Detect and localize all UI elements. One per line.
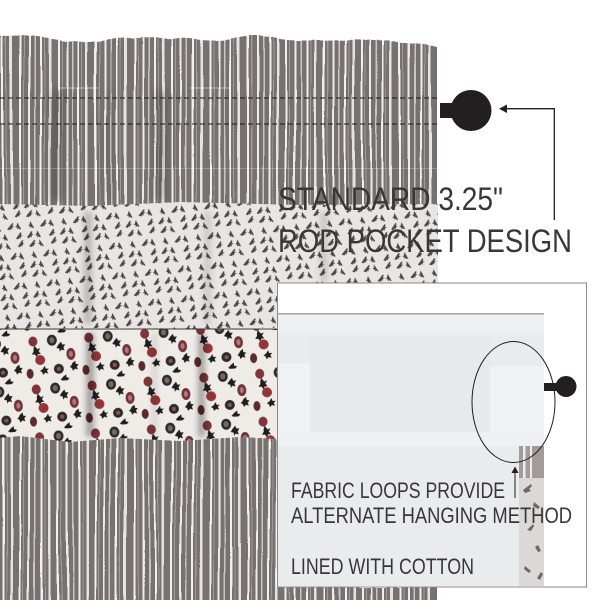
icon: curtain rod finial (440, 90, 492, 131)
arrow: fabric loop callout (512, 466, 518, 498)
icon: small rod finial (544, 376, 576, 397)
heading: rod pocket design (278, 181, 572, 259)
rod pocket stitching lines (0, 98, 438, 124)
heading: rod pocket design: STANDARD 3.25" (278, 181, 503, 217)
inset caption: FABRIC LOOPS PROVIDE (291, 478, 505, 503)
lining fabric (278, 313, 544, 586)
inset caption (291, 478, 572, 579)
curtain upper striped panel (0, 35, 445, 216)
arrow: rod pocket callout (499, 104, 554, 220)
panel: alternate hanging inset (278, 283, 586, 587)
curtain edge strip (519, 446, 544, 586)
ellipse highlighting fabric loop (472, 342, 555, 462)
ruffle: floral print (0, 328, 278, 442)
curtain lower striped panel (0, 432, 437, 600)
ruffle: leaf print (0, 202, 438, 330)
inset caption: LINED WITH COTTON (291, 554, 474, 579)
